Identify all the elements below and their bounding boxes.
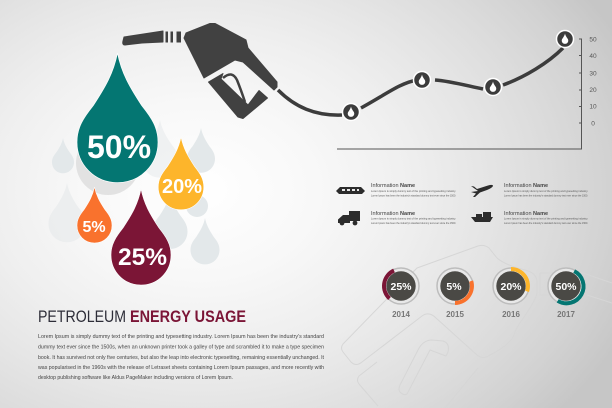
info text: top left: Lorem Ipsum has been the industry's standard dummy text ever since the 1500. (371, 194, 456, 198)
info text: top right: Lorem Ipsum is simply dummy text of the printing and typesetting industry. (504, 189, 588, 193)
chart axes (337, 39, 582, 149)
donut: 2015 5%: 2015 (446, 310, 464, 319)
watermark: faint nozzle outline (342, 245, 612, 408)
chart axis labels: 20 (589, 87, 597, 94)
info text: top left (371, 183, 456, 198)
info text: bottom right: Information Name (504, 211, 548, 217)
title (38, 307, 246, 326)
donut: 2016 20% (493, 268, 529, 319)
icon: cargo ship (471, 212, 493, 222)
background ghost drops (48, 120, 220, 264)
info text: bottom left: Lorem Ipsum is simply dummy text of the printing and typesetting industry. (371, 216, 456, 220)
drop: 50% teal (77, 53, 158, 183)
donut: 2015 5% (437, 268, 473, 319)
line chart: trend curve (278, 48, 563, 115)
chart marker: 2014 point (342, 104, 360, 120)
drop: 25% maroon (111, 189, 171, 285)
chart axis labels: 30 (589, 70, 597, 78)
body paragraph (37, 334, 324, 381)
donut: 2016 20%: 2016 (502, 310, 520, 319)
donut: 2014 25%: 2014 (392, 310, 410, 319)
drop: 25% maroon: 25% (118, 244, 167, 271)
info text: bottom left: Lorem Ipsum has been the industry's standard dummy text ever since the 1500. (371, 221, 456, 225)
body paragraph: was popularised in the 1960s with the release of Letraset sheets containing Lorem Ipsum passages, and more recently with (37, 365, 324, 371)
body paragraph: book. It has survived not only five centuries, but also the leap into electronic typesetting, remaining essentially unchanged. It (38, 355, 324, 361)
drop: 20% yellow (158, 137, 204, 210)
chart axis labels (589, 36, 597, 128)
donut: 2014 25% (383, 268, 419, 319)
drop: 20% yellow: 20% (162, 176, 202, 198)
donut: 2017 50%: 2017 (557, 310, 575, 319)
icon: train (336, 187, 365, 194)
info text: top left: Lorem Ipsum is simply dummy text of the printing and typesetting industry. (371, 189, 456, 193)
donut: 2017 50%: 50% (555, 281, 577, 293)
info text: top right: Information Name (504, 183, 548, 189)
donut: 2015 5%: 5% (446, 281, 462, 293)
body paragraph: Lorem Ipsum is simply dummy text of the printing and typesetting industry. Lorem Ipsum has been the industry's standard (38, 334, 324, 340)
chart marker: 2016 point (484, 78, 502, 96)
chart axis labels: 10 (589, 104, 597, 110)
body paragraph: desktop publishing software like Aldus PageMaker including versions of Lorem Ipsum. (38, 375, 233, 381)
info text: top left: Information Name (371, 183, 415, 189)
title: PETROLEUM (38, 307, 126, 326)
donut: 2017 50% (548, 268, 584, 319)
icon: airplane (471, 185, 493, 197)
donut: 2014 25%: 25% (390, 281, 412, 293)
icon: fuel nozzle (123, 24, 277, 118)
info text: bottom right: Lorem Ipsum is simply dummy text of the printing and typesetting industry. (504, 216, 588, 220)
info text: bottom left (371, 211, 456, 225)
icon: truck (338, 211, 360, 225)
chart marker: 2017 point (556, 30, 574, 48)
chart marker: 2015 point (414, 72, 430, 88)
donut: 2016 20%: 20% (500, 281, 522, 293)
chart axis labels: 50 (589, 36, 597, 44)
info text: bottom right (504, 211, 588, 225)
chart axis labels: 40 (589, 53, 597, 60)
drop: 50% teal: 50% (87, 129, 151, 165)
info text: top right: Lorem Ipsum has been the industry's standard dummy text ever since the 1500. (504, 194, 588, 198)
info text: bottom left: Information Name (371, 211, 415, 217)
chart axis labels: 0 (591, 120, 595, 128)
body paragraph: dummy text ever since the 1500s, when an unknown printer took a galley of type and scrambled it to make a type specimen (38, 344, 324, 350)
drop: 5% orange: 5% (82, 219, 106, 236)
drop: 5% orange (77, 187, 112, 243)
title: ENERGY USAGE (130, 307, 246, 326)
info text: bottom right: Lorem Ipsum has been the industry's standard dummy text ever since the 1500. (504, 221, 588, 225)
info text: top right (504, 183, 588, 198)
